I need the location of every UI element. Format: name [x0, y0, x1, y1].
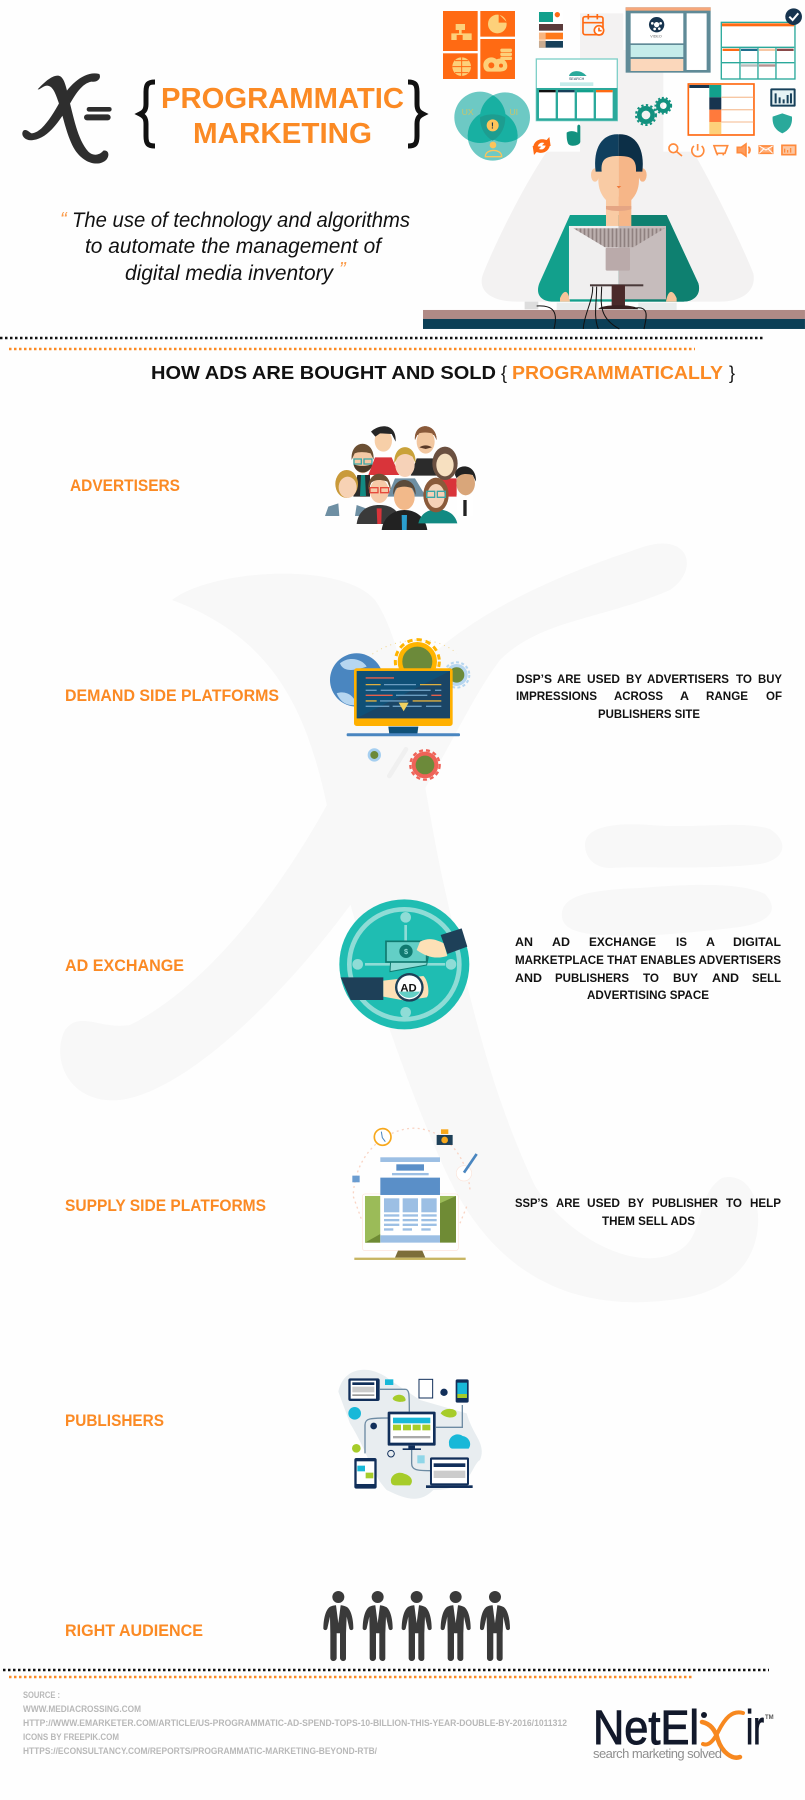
- video panel: VIDEO: [650, 35, 662, 39]
- source list: [23, 1690, 567, 1756]
- heading: how ads are bought and sold programmatically: }: [729, 363, 735, 383]
- quote: definition text: ”: [339, 259, 347, 281]
- source list: ICONS BY FREEPIK.COM: [23, 1732, 119, 1742]
- text: SSP description: TO: [726, 1196, 742, 1210]
- text: DSP description: USED: [587, 672, 620, 686]
- text: DSP description: BY: [626, 672, 642, 686]
- text: ad exchange description: [515, 935, 781, 1002]
- text: DSP description: IMPRESSIONS: [516, 689, 597, 703]
- text: SSP description: ARE: [556, 1196, 580, 1210]
- heading: how ads are bought and sold programmatically: {: [501, 363, 507, 383]
- venn diagram UX UI: !: [491, 121, 494, 131]
- text: SSP description: BY: [628, 1196, 644, 1210]
- logo: NetElixir: search marketing solved: [593, 1746, 722, 1761]
- text: DSP description: OF: [766, 689, 782, 703]
- quote: definition text: digital media inventory: [125, 262, 334, 285]
- title: Programmatic Marketing: PROGRAMMATIC: [161, 83, 404, 115]
- title: Programmatic Marketing: MARKETING: [193, 118, 372, 150]
- text: SSP description: THEM SELL ADS: [602, 1214, 695, 1228]
- heading: how ads are bought and sold programmatically: PROGRAMMATICALLY: [512, 363, 723, 383]
- source list: WWW.MEDIACROSSING.COM: [23, 1704, 141, 1714]
- title: Programmatic Marketing: [161, 83, 404, 150]
- source list: HTTP://WWW.EMARKETER.COM/ARTICLE/US-PROGRAMMATIC-AD-SPEND-TOPS-10-BILLION-THIS-YEAR-DOUBLE-BY-2016/1011312: [23, 1718, 567, 1728]
- text: ad exchange description: AD: [552, 935, 570, 949]
- text: ad exchange description: MARKETPLACE THAT ENABLES ADVERTISERS: [515, 953, 781, 967]
- video panel: [626, 7, 711, 73]
- quote: definition text: “: [60, 209, 68, 231]
- divider: top dotted lines: [0, 338, 765, 349]
- text: SSP description: USED: [587, 1196, 620, 1210]
- text: SSP description: PUBLISHER: [652, 1196, 718, 1210]
- label: ad exchange: AD EXCHANGE: [65, 957, 184, 975]
- logo: NetElixir: TM: [765, 1715, 774, 1721]
- text: ad exchange description: BUY: [673, 971, 698, 985]
- text: ad exchange description: DIGITAL: [733, 935, 781, 949]
- text: ad exchange description: SELL: [752, 971, 781, 985]
- text: ad exchange description: PUBLISHERS: [555, 971, 629, 985]
- icon: demand side platform monitor: [330, 640, 469, 780]
- text: DSP description: ARE: [557, 672, 581, 686]
- orange list panel: [688, 84, 754, 135]
- heading: how ads are bought and sold programmatically: [151, 363, 735, 383]
- source list: SOURCE :: [23, 1690, 60, 1700]
- icon: supply side platform screen: [352, 1128, 477, 1260]
- heading: how ads are bought and sold programmatically: HOW ADS ARE BOUGHT AND SOLD: [151, 363, 496, 383]
- quote: definition text: to automate the management of: [85, 235, 383, 258]
- title: left brace: [140, 82, 155, 146]
- search page panel: SEARCH: [569, 77, 585, 81]
- logo: NetElixir: NetEl: [593, 1702, 699, 1755]
- icon: ad exchange coin: $: [404, 947, 408, 956]
- text: DSP description: A: [680, 689, 689, 703]
- title: right brace: [408, 82, 423, 146]
- label: supply side platforms: SUPPLY SIDE PLATFORMS: [65, 1197, 266, 1215]
- text: ad exchange description: EXCHANGE: [589, 935, 656, 949]
- search page panel: [536, 59, 617, 121]
- text: DSP description: RANGE: [706, 689, 748, 703]
- logo: NetElixir: [593, 1702, 774, 1761]
- man: head, shirt and monitor: [538, 134, 699, 309]
- hero illustration: man at computer with web icons: [423, 7, 805, 329]
- text: DSP description: ACROSS: [614, 689, 663, 703]
- text: DSP description: ADVERTISERS: [647, 672, 729, 686]
- text: ad exchange description: TO: [643, 971, 659, 985]
- venn diagram UX UI: [454, 92, 530, 161]
- text: ad exchange description: A: [706, 935, 715, 949]
- logo: NetElixir: ir: [746, 1702, 764, 1755]
- divider: bottom dotted lines: [3, 1670, 769, 1677]
- text: SSP description: SSP’S: [515, 1196, 548, 1210]
- venn diagram UX UI: UX: [462, 107, 474, 117]
- orange icon tiles: [443, 11, 515, 79]
- icon: group of advertisers: [325, 426, 476, 530]
- quote: definition text: The use of technology and algorithms: [72, 209, 410, 232]
- text: ad exchange description: AN: [515, 935, 533, 949]
- venn diagram UX UI: UI: [509, 107, 518, 117]
- hand pointer: [567, 125, 580, 146]
- icon: publisher devices network: [338, 1370, 482, 1499]
- grid panel with check badge: [721, 8, 802, 79]
- calendar icon: [583, 14, 604, 35]
- text: ad exchange description: IS: [676, 935, 687, 949]
- backdrop shape: [482, 13, 754, 302]
- label: publishers: PUBLISHERS: [65, 1412, 164, 1430]
- text: DSP description: PUBLISHERS SITE: [598, 707, 700, 721]
- text: ad exchange description: ADVERTISING SPACE: [587, 988, 709, 1002]
- text: ad exchange description: AND: [712, 971, 739, 985]
- watermark: large X symbol: [60, 543, 782, 1302]
- row of small orange icons: [669, 144, 796, 157]
- label: advertisers: ADVERTISERS: [70, 477, 180, 495]
- quote: definition text: [60, 209, 410, 285]
- text: DSP description: TO: [736, 672, 752, 686]
- text: DSP description: [516, 672, 782, 721]
- icon: ad exchange coin: [339, 899, 469, 1029]
- text: DSP description: DSP’S: [516, 672, 552, 686]
- gears: [636, 98, 671, 125]
- small layout panel: [539, 10, 563, 48]
- icon: ad exchange coin: AD: [400, 983, 417, 995]
- text: ad exchange description: AND: [515, 971, 542, 985]
- bar chart icon: [770, 88, 796, 107]
- sync arrows: [533, 137, 551, 155]
- label: demand side platforms: DEMAND SIDE PLATFORMS: [65, 687, 279, 705]
- desk: [423, 287, 805, 329]
- shield icon: [773, 113, 792, 133]
- logo: X equals symbol: [22, 73, 112, 164]
- label: right audience: RIGHT AUDIENCE: [65, 1622, 203, 1640]
- source list: HTTPS://ECONSULTANCY.COM/REPORTS/PROGRAMMATIC-MARKETING-BEYOND-RTB/: [23, 1746, 377, 1756]
- text: SSP description: HELP: [750, 1196, 781, 1210]
- icon: five business people: [323, 1591, 510, 1661]
- text: DSP description: BUY: [758, 672, 782, 686]
- text: SSP description: [515, 1196, 781, 1228]
